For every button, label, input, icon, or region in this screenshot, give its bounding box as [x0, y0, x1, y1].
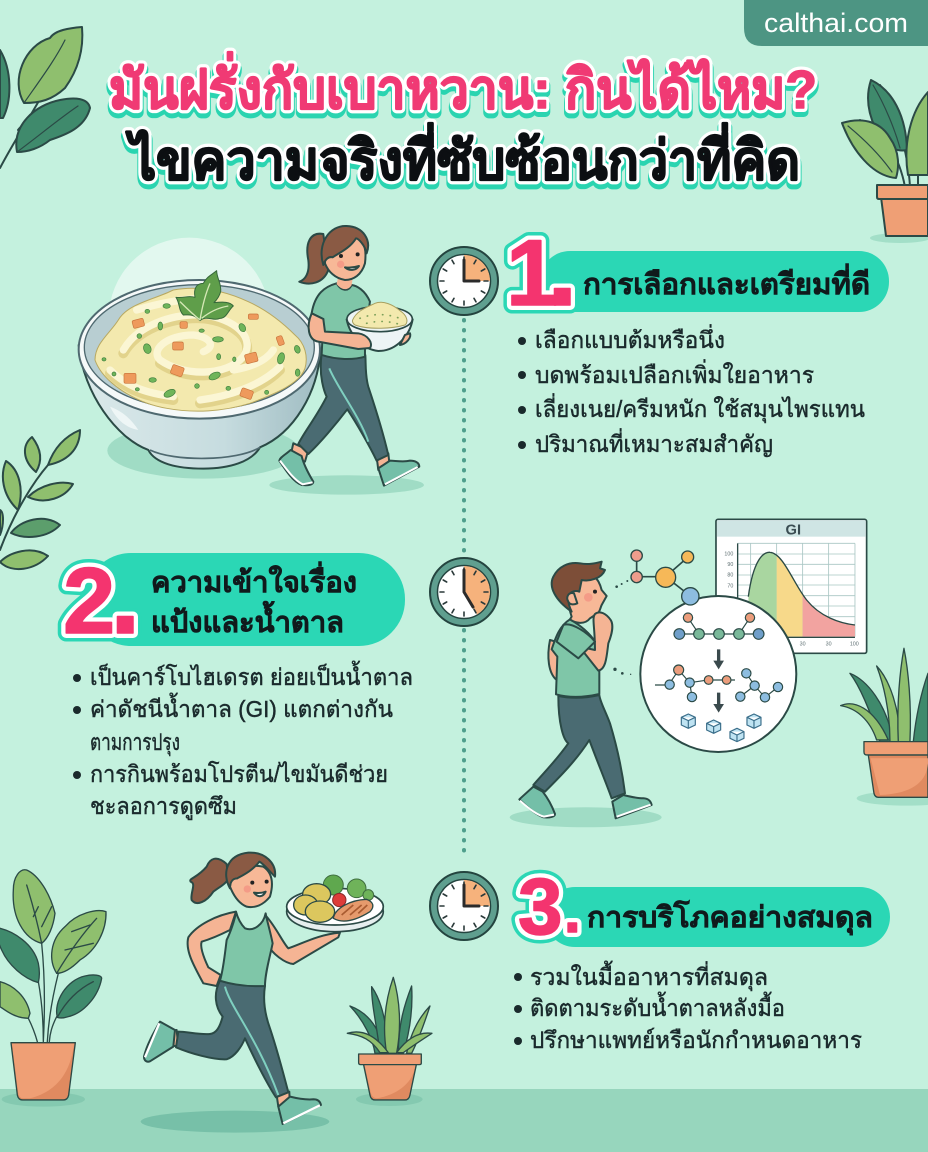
number 1: 1	[506, 220, 558, 325]
section 1 bullet list: บดพร้อมเปลือกเพิ่มใยอาหาร	[535, 359, 814, 388]
number 1: .	[547, 206, 578, 329]
section 2 heading: ความเข้าใจเรื่อง	[151, 561, 357, 599]
plant: bottom-left potted	[0, 870, 106, 1107]
title line 1: มันฝรั่งกับเบาหวาน: กินได้ไหม?	[109, 51, 817, 120]
GI chart: 100	[724, 552, 733, 558]
neck	[337, 275, 353, 289]
title line 2: ไขความจริงที่ซับซ้อนกว่าที่คิด	[125, 122, 800, 191]
floor band	[0, 1089, 928, 1152]
bowl shadow	[107, 423, 299, 479]
plant: bottom-middle potted	[347, 977, 432, 1106]
GI chart: 70	[727, 583, 733, 589]
bowl rim	[79, 280, 320, 419]
number 3: 3	[518, 862, 562, 951]
section 1 bullet list: เลือกแบบต้มหรือนึ่ง	[535, 324, 725, 353]
floating molecule	[631, 550, 694, 596]
ponytail	[299, 234, 328, 284]
far arm	[267, 917, 340, 964]
illustration: woman carrying a bowl	[269, 226, 424, 495]
shoes	[519, 787, 555, 817]
illustration: mashed potato bowl	[79, 238, 321, 479]
number 1: 1	[506, 220, 558, 325]
section 3 bullet list	[514, 961, 862, 1053]
section 2 bullet list: ชะลอการดูดซึม	[90, 793, 237, 820]
GI chart: GI	[786, 523, 801, 539]
website tag: calthai.com	[764, 8, 908, 38]
title line 1: มันฝรั่งกับเบาหวาน: กินได้ไหม?	[109, 55, 817, 124]
section 3 heading: การบริโภคอย่างสมดุล	[587, 899, 873, 935]
clock 2	[430, 558, 498, 626]
glow circle	[109, 238, 270, 399]
number 1: .	[547, 206, 578, 329]
number 2	[63, 534, 141, 657]
number 2: 2	[63, 548, 115, 653]
GI chart	[716, 519, 867, 653]
number 3: .	[564, 878, 581, 945]
pot	[870, 233, 928, 243]
thought dots	[613, 580, 631, 675]
section 2 heading	[63, 534, 405, 657]
head	[325, 237, 366, 280]
illustration: woman running with plate	[141, 853, 383, 1133]
clock 3	[430, 872, 498, 940]
section 2 bullet list: ตามการปรุง	[90, 729, 180, 756]
GI chart: 80	[727, 573, 733, 579]
GI chart: 100	[850, 642, 859, 648]
number 2: 2	[63, 548, 115, 653]
head	[230, 866, 272, 907]
number 1: 1	[506, 220, 558, 325]
number 2: .	[110, 534, 141, 657]
arrows	[713, 649, 724, 713]
section 2 bullet list: ค่าดัชนีน้ำตาล (GI) แตกต่างกัน	[90, 693, 393, 722]
near arm	[188, 912, 236, 986]
arm	[309, 313, 371, 349]
small bowl	[347, 319, 413, 351]
section 3 bullet list: ปรึกษาแพทย์หรือนักกำหนดอาหาร	[530, 1027, 862, 1053]
section 1 bullet list	[518, 324, 865, 457]
broken chains	[655, 665, 783, 702]
number 3: .	[564, 878, 581, 945]
plant: right mid potted	[841, 648, 928, 806]
trousers	[533, 695, 625, 798]
tank top	[220, 912, 273, 986]
number 3: .	[564, 878, 581, 945]
number 2: 2	[63, 548, 115, 653]
section 1 heading: การเลือกและเตรียมที่ดี	[583, 263, 870, 301]
ponytail	[190, 859, 228, 903]
shoes	[144, 1022, 175, 1062]
plate of food	[287, 892, 383, 932]
bowl body	[79, 345, 321, 469]
section 1 bullet list: ปริมาณที่เหมาะสมสำคัญ	[535, 428, 773, 457]
website tag	[744, 0, 928, 46]
number 3: 3	[518, 862, 562, 951]
number 1: .	[547, 206, 578, 329]
plant: left sprig	[0, 430, 80, 569]
head	[568, 572, 607, 623]
GI chart: 90	[727, 562, 733, 568]
section 3 bullet list: รวมในมื้ออาหารที่สมดุล	[530, 961, 768, 991]
leggings	[298, 354, 388, 461]
parsley	[176, 271, 233, 321]
plant: top-left leaves	[0, 27, 90, 168]
section 2 heading: แป้งและน้ำตาล	[151, 600, 344, 639]
shoes	[279, 450, 313, 485]
section 2 bullet list: การกินพร้อมโปรตีน/ไขมันดีช่วย	[90, 761, 388, 787]
title line 2: ไขความจริงที่ซับซ้อนกว่าที่คิด	[125, 122, 800, 191]
number 2: .	[110, 534, 141, 657]
number 3: 3	[518, 862, 562, 951]
number 1	[506, 206, 578, 329]
title line 2: ไขความจริงที่ซับซ้อนกว่าที่คิด	[125, 126, 800, 195]
illustration: thinking man	[510, 562, 662, 827]
title	[109, 51, 817, 195]
number 2: .	[110, 534, 141, 657]
section 3 heading	[518, 862, 890, 951]
GI chart: 30	[826, 642, 832, 648]
title line 1: มันฝรั่งกับเบาหวาน: กินได้ไหม?	[109, 51, 817, 120]
section 1 bullet list: เลี่ยงเนย/ครีมหนัก ใช้สมุนไพรแทน	[535, 393, 865, 423]
GI chart: 30	[800, 642, 806, 648]
mashed potato	[95, 288, 306, 411]
t-shirt	[552, 619, 599, 697]
thinking arm	[579, 612, 612, 671]
clock 1	[430, 247, 498, 315]
section 2 bullet list	[73, 661, 413, 820]
plant: top-right potted	[842, 80, 928, 243]
section 1 heading	[506, 206, 889, 329]
section 3 bullet list: ติดตามระดับน้ำตาลหลังมื้อ	[530, 992, 785, 1021]
section 2 bullet list: เป็นคาร์โบไฮเดรต ย่อยเป็นน้ำตาล	[90, 661, 413, 690]
starch breakdown magnifier	[631, 550, 796, 752]
starch chain	[674, 613, 764, 639]
leggings	[176, 981, 288, 1097]
timeline dotted line	[462, 320, 466, 860]
sugar cubes	[681, 714, 761, 742]
t-shirt	[312, 283, 370, 359]
